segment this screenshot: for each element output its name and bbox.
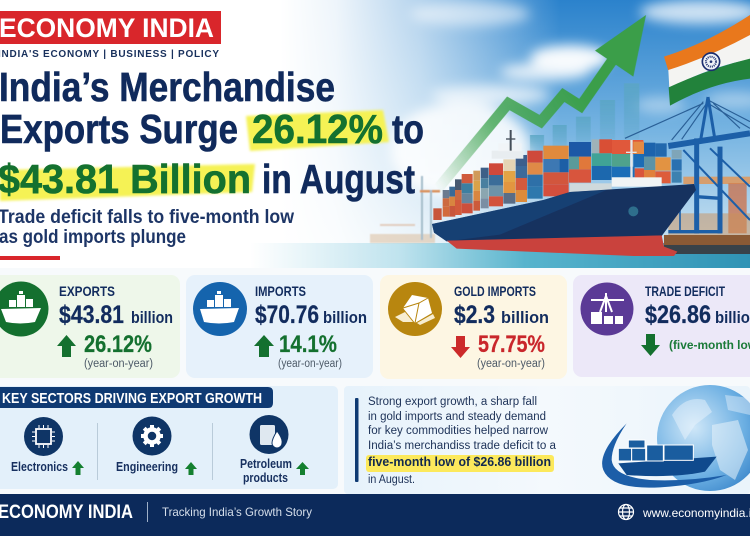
sky with clouds [333,0,750,243]
headline: India’s Merchandise [0,64,335,110]
subheading [0,207,294,248]
panel: exports: billion [131,308,173,327]
icon: cargo ship [0,282,48,336]
panel: imports: IMPORTS [255,283,306,299]
footer bar [0,494,750,536]
panel: gold imports: (year-on-year) [477,358,545,370]
panel: imports: billion [323,308,367,327]
panel: summary text: in gold imports and steady demand [368,411,546,423]
panel: gold imports: GOLD IMPORTS [454,283,536,299]
panel: summary text: five-month low of $26.86 billion [368,455,551,469]
footer bar: Tracking India’s Growth Story [162,505,312,519]
headline: 26.12% [252,106,383,152]
red accent rule [0,256,60,260]
panel: exports [0,275,180,378]
arrow down [641,334,660,356]
footer bar: ECONOMY INDIA [0,502,133,523]
panel: trade deficit: TRADE DEFICIT [645,283,725,299]
yellow highlights [0,110,389,201]
ship containers [433,139,682,220]
headline: $43.81 Billion [0,156,251,202]
logo banner: ECONOMY INDIA [0,13,214,43]
arrow up [57,335,76,357]
ship superstructure and masts [492,130,662,192]
icon: gold bars [388,282,442,336]
dock and orange gantry [664,177,750,254]
panel: summary text: in August. [368,474,415,486]
panel: exports: 26.12% [84,331,152,358]
ship, arrow, crane and flag drawn in zoomed coordinates [432,15,750,256]
panel: key sectors [0,386,338,489]
panel: trade deficit: $26.86 [645,301,711,329]
headline: Exports Surge [0,106,238,152]
icon: microchip [24,417,63,456]
icon: gear [132,416,172,456]
arrow up [254,335,274,357]
ship hull [432,184,696,241]
tagline: INDIA'S ECONOMY | BUSINESS | POLICY [0,49,219,60]
globe [657,385,750,491]
green growth arrow [437,15,646,190]
panel: exports: EXPORTS [59,283,115,299]
headline: to [392,106,424,152]
panel: imports: $70.76 [255,301,319,329]
Indian flag [664,15,750,106]
panel: imports [186,275,373,378]
translucent rising bars [530,83,639,152]
ship with swoosh [602,423,727,488]
section heading [0,387,273,408]
panel: summary text: India’s merchandiss trade deficit to a [368,440,557,452]
icon: web globe [618,504,634,520]
electronics label: Electronics [11,460,68,474]
petroleum products label: products [243,471,288,485]
panel: summary text: Strong export growth, a sharp fall [368,396,537,408]
icon: port crane and containers [580,282,634,336]
crane [625,97,750,233]
subheading: as gold imports plunge [0,227,186,248]
petroleum products label [240,457,309,485]
panel: summary text [344,386,750,494]
panel: imports: 14.1% [279,331,337,358]
section heading: KEY SECTORS DRIVING EXPORT GROWTH [2,391,262,407]
petroleum products label: Petroleum [240,457,292,471]
panel: exports: $43.81 [59,301,124,329]
panel: summary text: for key commodities helped narrow [368,425,549,437]
panel: exports: (year-on-year) [84,358,153,370]
illustration: globe and ship [602,385,750,491]
headline: in August [262,156,415,202]
distant port [370,176,440,243]
icon: cargo ship [193,282,247,336]
water [250,243,750,268]
summary highlight [366,455,554,472]
panel: gold imports [380,275,567,379]
panel: trade deficit [573,275,750,377]
headline [0,64,424,202]
icon: oil barrel and drop [250,415,288,454]
panel: gold imports: billion [501,308,549,327]
panel: imports: (year-on-year) [278,358,342,370]
panel: gold imports: 57.75% [478,331,545,358]
engineering label: Engineering [116,460,178,474]
subheading: Trade deficit falls to five-month low [0,207,294,228]
hero photo: sky, ship, crane and flag [0,0,750,268]
arrow down [451,336,470,358]
panel: gold imports: $2.3 [454,301,495,329]
